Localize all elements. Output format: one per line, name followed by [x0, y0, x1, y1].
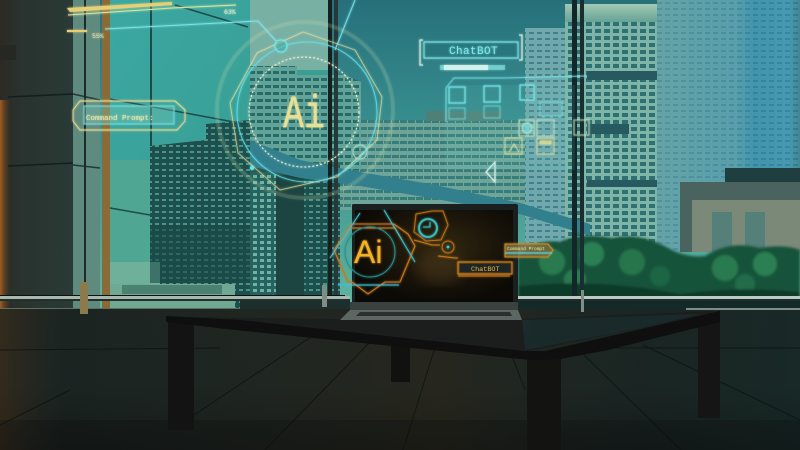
- Ai cyan lines: [330, 210, 415, 285]
- hologram: big Ai circle: [217, 0, 393, 198]
- hologram: dashboard grid: [446, 76, 589, 182]
- table leg: back centre: [391, 340, 410, 382]
- building: blue glass tower: [657, 0, 800, 252]
- hologram: top left bars: [67, 2, 277, 42]
- panel text: ChatBOT: [449, 46, 498, 58]
- progress bar: [440, 65, 505, 70]
- gauge icon: [414, 211, 448, 241]
- box inner: [84, 106, 174, 124]
- screen glow: [416, 252, 464, 284]
- laptop hinge strip: [350, 302, 518, 310]
- tile row four: [505, 138, 554, 154]
- ChatBOT label on laptop: [458, 262, 512, 274]
- arrow marker: [486, 162, 495, 182]
- tile row three: [519, 120, 589, 136]
- 55 percent: 55%: [92, 33, 104, 40]
- railing: [0, 295, 800, 310]
- outer faint ring: [217, 22, 393, 198]
- background: sky: [0, 0, 800, 310]
- glow wash over hologram area: [445, 85, 575, 170]
- cyan line: [105, 21, 277, 42]
- reflected building: dark block: [150, 120, 250, 310]
- Ai hexagon: [334, 224, 415, 294]
- laptop lid: [352, 204, 518, 311]
- table leg: left: [168, 322, 194, 430]
- table leg: front: [527, 355, 561, 450]
- node ring small: [353, 145, 367, 159]
- node icon: [442, 241, 454, 253]
- hologram: Ai on laptop: [330, 210, 553, 294]
- Ai circle: [345, 227, 395, 277]
- node dot: [250, 166, 254, 170]
- trees: [518, 236, 800, 300]
- yellow bar lower: [67, 30, 87, 32]
- hologram: Command Prompt box: [73, 101, 185, 130]
- box outer: [73, 101, 185, 130]
- glass diagonal reflection lines: [110, 5, 250, 215]
- tile row two: [449, 102, 562, 119]
- window mullion: right: [572, 0, 584, 296]
- octagon: [230, 32, 382, 190]
- panel brackets: [420, 35, 522, 65]
- laptop keyboard deck: [340, 310, 522, 320]
- reflected building: round tower: [250, 66, 361, 170]
- node ring: [275, 40, 287, 52]
- reflected street area: [110, 160, 250, 310]
- rail posts: [80, 282, 584, 314]
- table reflection of city: [522, 314, 700, 350]
- panel frame: [424, 42, 518, 58]
- laptop: [340, 204, 522, 320]
- yellow bar upper: [67, 2, 172, 12]
- building: central low hotel: [330, 111, 575, 210]
- reflected building: lower middle towers: [250, 165, 340, 296]
- dashed ring: [249, 57, 359, 167]
- Ai laptop text: Ai: [354, 234, 382, 270]
- building: central tower: [525, 4, 658, 247]
- laptop keys: [356, 312, 512, 316]
- glass table: [166, 311, 720, 450]
- cyan diagonal: [335, 0, 355, 50]
- below-rail strip: [240, 300, 800, 310]
- Command prompt label on laptop: Command Prompt: [507, 246, 545, 252]
- hologram: ChatBOT panel: [420, 35, 522, 70]
- window mullion: thin dark: [84, 0, 86, 298]
- big Ai text: Ai: [283, 89, 325, 141]
- connector lines: [414, 240, 510, 276]
- cityscape buildings: [330, 0, 800, 300]
- reflected roof: blue canopy: [250, 140, 590, 236]
- laptop screen: [355, 210, 513, 302]
- left structural wall: [0, 0, 100, 310]
- building: low tan block: [680, 168, 800, 252]
- box text: Command Prompt:: [86, 115, 154, 123]
- window mullion: centre: [328, 0, 338, 296]
- Command prompt label on laptop: [505, 244, 553, 257]
- 63 percent: 63%: [224, 9, 236, 16]
- reflection pane: left glass: [110, 0, 330, 310]
- cyan ring: [237, 42, 377, 182]
- bottom vignette: [0, 420, 800, 450]
- floor: [0, 309, 800, 450]
- thin line upper: [68, 5, 236, 15]
- window mullion: centre left: [150, 0, 152, 146]
- ChatBOT label on laptop: ChatBOT: [471, 266, 500, 274]
- table frame edges: [166, 311, 720, 360]
- reflection: pale glass panel band: [250, 0, 330, 70]
- table leg: right: [698, 322, 720, 418]
- dashboard frame: [446, 76, 586, 122]
- window mullion: orange frame: [102, 0, 110, 310]
- floor tile lines: [0, 337, 800, 450]
- table top surface: [166, 311, 720, 351]
- tile row one: [449, 85, 534, 103]
